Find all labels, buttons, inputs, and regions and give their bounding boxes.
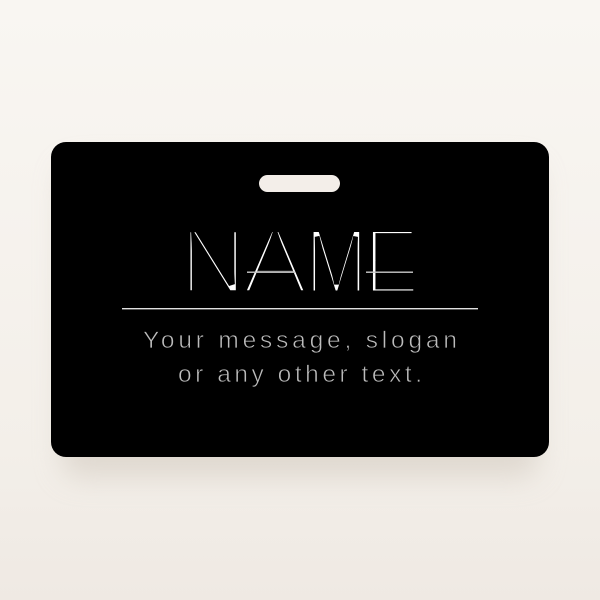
divider line [122, 308, 478, 309]
text block: message: or any other text. [178, 361, 422, 388]
crossbar accents [247, 272, 413, 273]
heading: NAME: E [363, 208, 420, 314]
text block: message [143, 327, 457, 388]
panel: black badge card [51, 142, 549, 457]
heading: NAME: N [180, 209, 247, 314]
lanyard slot [259, 175, 340, 192]
heading: NAME: M [305, 210, 368, 314]
text block: message: Your message, slogan [143, 327, 457, 354]
heading: NAME [180, 208, 420, 314]
heading: NAME: A [242, 208, 309, 314]
